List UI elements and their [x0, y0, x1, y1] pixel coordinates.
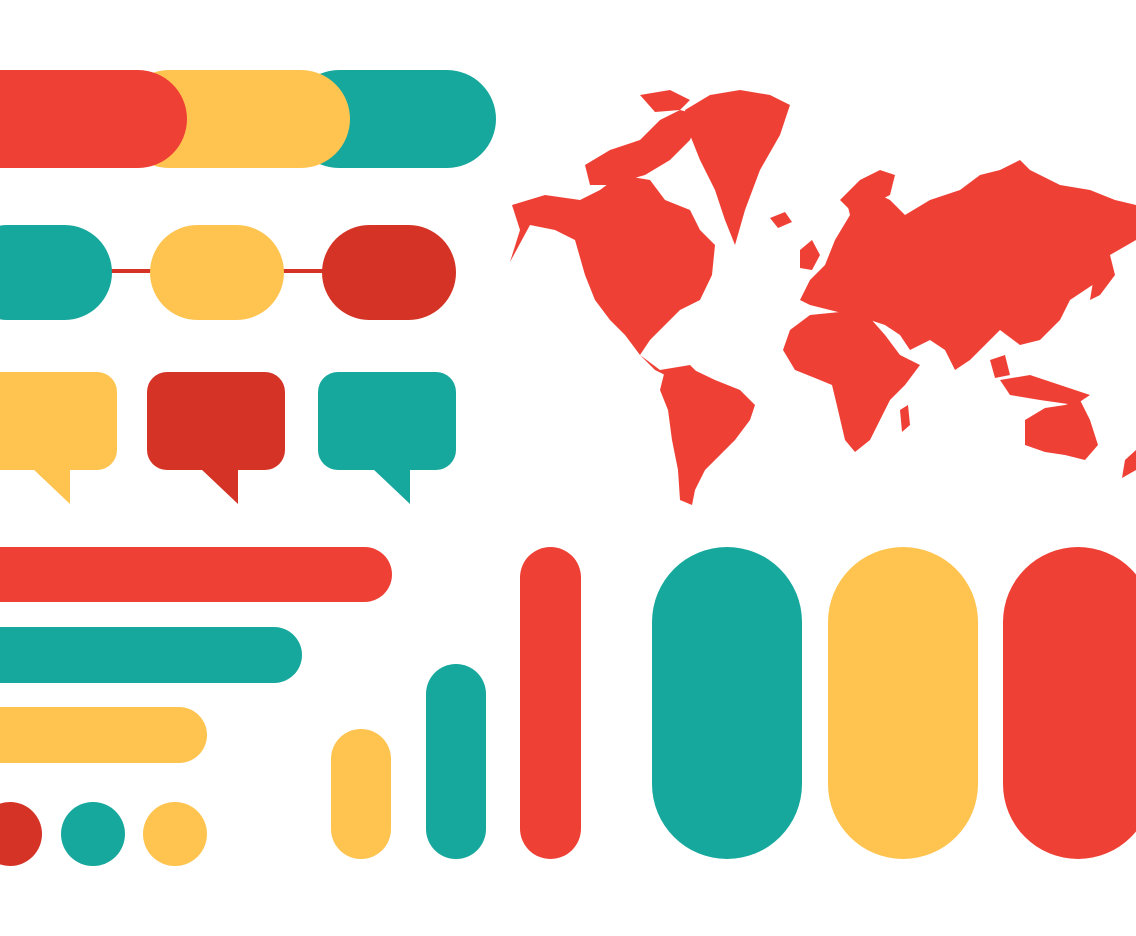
- iceland: [770, 212, 792, 228]
- greenland: [685, 90, 790, 245]
- europe + asia: [800, 160, 1136, 370]
- stacked pill bar: [0, 70, 496, 168]
- horizontal bar chart: [0, 547, 392, 763]
- scandinavia: [840, 170, 895, 215]
- connected pills timeline: [0, 225, 456, 320]
- speech bubbles: [0, 372, 456, 504]
- north america: [510, 175, 715, 380]
- britain: [800, 240, 820, 270]
- africa: [783, 312, 920, 452]
- madagascar: [900, 405, 910, 432]
- southeast asia islands: [1000, 375, 1090, 405]
- big pills: [652, 547, 1136, 859]
- new zealand: [1122, 450, 1136, 478]
- japan: [1090, 255, 1115, 300]
- australia: [1025, 400, 1098, 460]
- world map: [510, 90, 1136, 505]
- south america: [660, 368, 755, 505]
- dots: [0, 802, 207, 866]
- canadian islands: [585, 110, 700, 185]
- vertical bar chart: [331, 547, 581, 859]
